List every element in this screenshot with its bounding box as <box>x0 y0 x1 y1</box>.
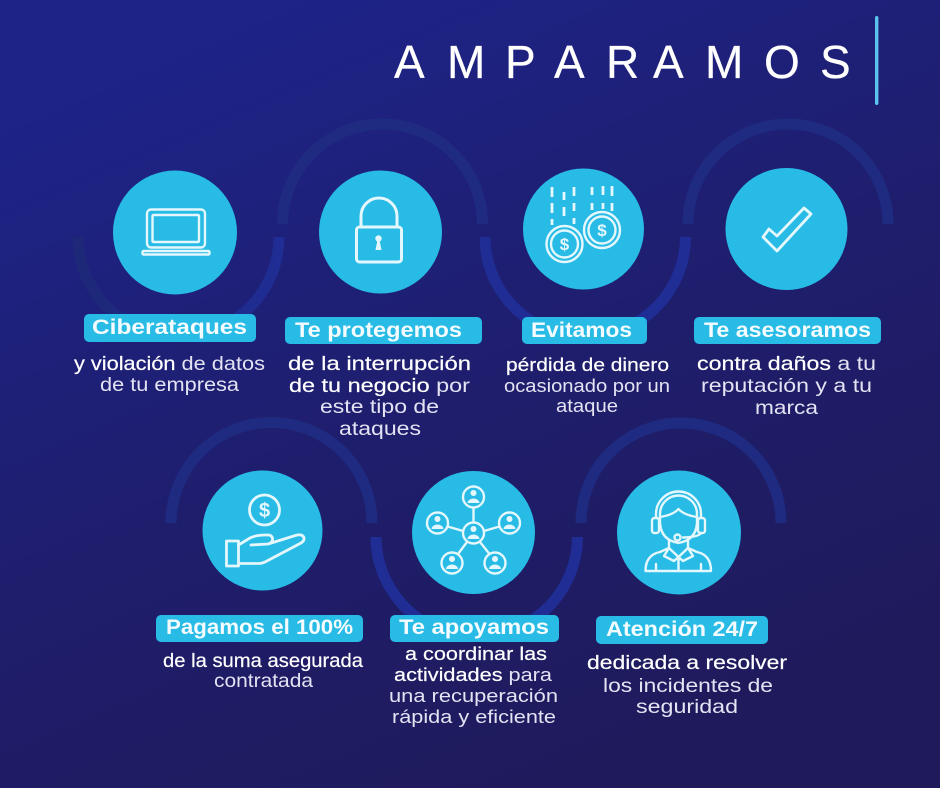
label pill <box>156 615 363 642</box>
description: pérdida de dinero <box>506 354 669 375</box>
description: contra daños a tu <box>697 353 876 375</box>
icon: hand holding coin: $ <box>259 500 270 522</box>
icon: falling coins: $ <box>560 235 570 254</box>
icon circle <box>202 470 322 590</box>
description: marca <box>755 397 818 419</box>
pill text: Evitamos <box>531 319 632 342</box>
description: a coordinar las <box>405 643 547 664</box>
icon: laptop <box>142 210 210 254</box>
icon circle <box>726 168 848 290</box>
description: contratada <box>214 670 313 692</box>
description: este tipo de <box>320 396 439 418</box>
panel: Te asesoramos <box>694 168 881 419</box>
description: seguridad <box>636 696 738 718</box>
icon: people network <box>427 486 520 574</box>
description: dedicada a resolver <box>587 652 788 674</box>
description: y violación de datos <box>74 353 265 375</box>
panel: Te apoyamos <box>389 471 559 727</box>
title accent bar <box>875 16 878 105</box>
description: de la suma asegurada <box>163 650 363 672</box>
icon: falling coins <box>546 186 620 262</box>
pill text: Atención 24/7 <box>606 618 758 641</box>
icon circle <box>617 470 741 594</box>
description: ataque <box>556 395 618 416</box>
description <box>504 354 670 416</box>
title: AMPARAMOS <box>394 36 851 88</box>
label pill <box>390 615 559 642</box>
pill text: Ciberataques <box>92 316 247 339</box>
decorative arcs <box>78 124 888 625</box>
description <box>587 652 788 718</box>
icon circle <box>113 170 237 294</box>
icon circle <box>523 168 644 290</box>
pill text: Te asesoramos <box>704 319 871 342</box>
description: los incidentes de <box>603 675 773 697</box>
description: de la interrupción <box>288 353 471 375</box>
icon: padlock <box>356 198 402 262</box>
panel: Te protegemos <box>285 170 482 440</box>
label pill <box>596 616 768 644</box>
panel: Ciberataques <box>74 170 265 396</box>
description <box>697 353 876 419</box>
icon: falling coins: $ <box>597 221 607 240</box>
description: actividades para <box>394 664 553 685</box>
icon circle <box>412 471 535 594</box>
pill text: Pagamos el 100% <box>166 616 353 639</box>
panel: Pagamos el 100% <box>156 470 363 692</box>
description: reputación y a tu <box>701 375 872 397</box>
pill text: Te protegemos <box>295 319 462 342</box>
label pill <box>285 317 482 344</box>
label pill <box>84 314 256 342</box>
icon: support agent with headset <box>646 492 711 571</box>
description <box>163 650 363 692</box>
description: rápida y eficiente <box>392 706 556 727</box>
description <box>74 353 265 396</box>
label pill <box>694 317 881 344</box>
description: ocasionado por un <box>504 375 670 396</box>
label pill <box>522 317 647 344</box>
description: de tu negocio por <box>289 375 471 397</box>
icon circle <box>319 170 442 294</box>
pill text: Te apoyamos <box>399 616 549 639</box>
description: ataques <box>339 418 421 440</box>
panel: Atención 24/7 <box>587 470 788 718</box>
description: de tu empresa <box>100 374 239 396</box>
panel: Evitamos <box>504 168 670 416</box>
description <box>288 353 471 440</box>
description: una recuperación <box>389 685 558 706</box>
icon: hand holding coin <box>226 495 304 566</box>
icon: check mark <box>763 208 811 251</box>
description <box>389 643 558 727</box>
